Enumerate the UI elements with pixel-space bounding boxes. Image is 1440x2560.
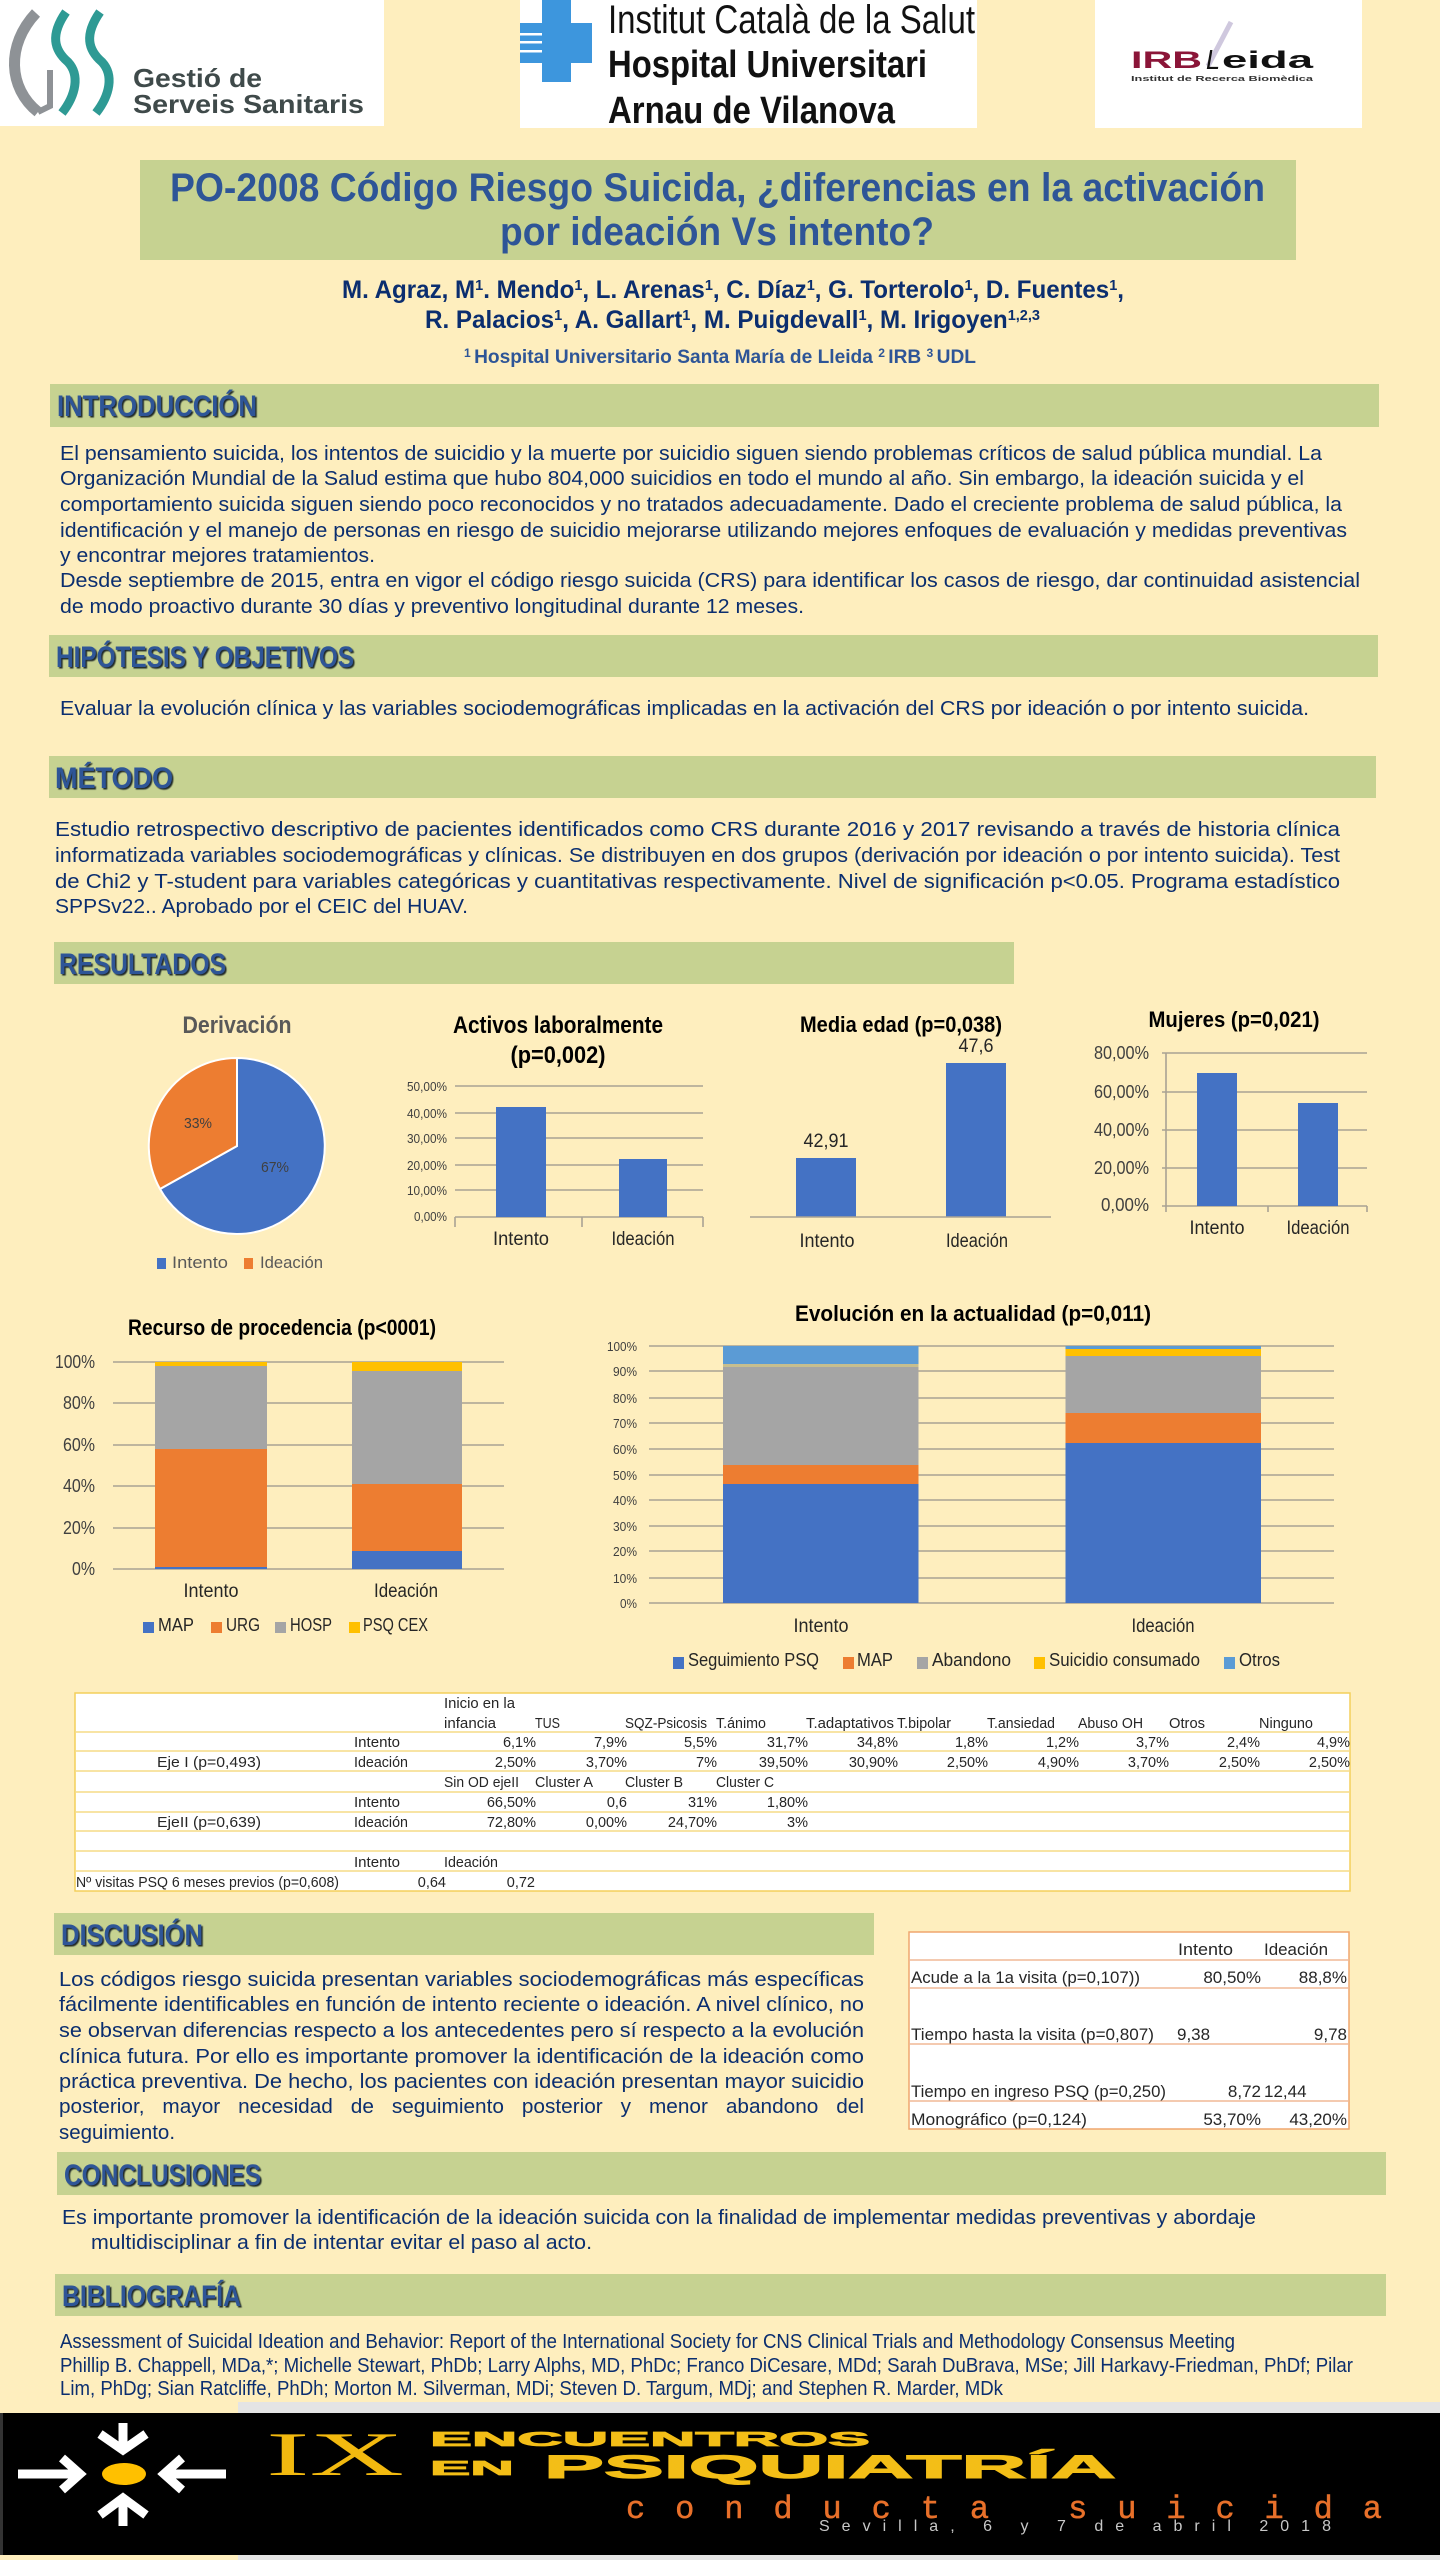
bar chart: activos laboralmente: 20,00% <box>407 1158 447 1173</box>
table: visitas e ingreso: 80,50% <box>1203 1968 1261 1987</box>
table: visitas e ingreso: 53,70% <box>1203 2110 1261 2129</box>
bar chart: media edad: Ideación <box>946 1231 1008 1252</box>
authors: 1 <box>705 277 713 294</box>
authors: , M. Irigoyen <box>867 306 1008 334</box>
table: visitas e ingreso: Tiempo hasta la visita (p=0,807) <box>911 2025 1154 2044</box>
text block: discusión: se observan diferencias respecto a los antecedentes pero sí respecto a la evolución <box>59 2019 864 2042</box>
banner: IX Encuentros en Psiquiatría: EN <box>430 2458 514 2480</box>
stacked bar chart: evolución en la actualidad: Ideación <box>1132 1616 1194 1637</box>
table: eje I, eje II, visitas: 0,00% <box>586 1815 627 1831</box>
pie chart: derivación <box>149 1012 325 1272</box>
table: eje I, eje II, visitas: infancia <box>444 1716 497 1732</box>
table: eje I, eje II, visitas: 2,50% <box>947 1755 988 1771</box>
table: eje I, eje II, visitas: Abuso OH <box>1078 1716 1143 1732</box>
table: eje I, eje II, visitas: Cluster A <box>535 1775 593 1791</box>
authors: 1,2,3 <box>1008 307 1040 324</box>
affiliations: UDL <box>937 347 976 368</box>
table: eje I, eje II, visitas: 3,70% <box>586 1755 627 1771</box>
panel: conclusiones <box>57 2152 1386 2254</box>
bar chart: mujeres: Intento <box>1190 1218 1244 1239</box>
stacked bar chart: recurso de procedencia: 40% <box>63 1476 95 1496</box>
panel: hipótesis y objetivos <box>49 635 1378 720</box>
heading: discusión: DISCUSIÓN <box>61 1918 203 1952</box>
logo: Hospital Universitari Arnau de Vilanova: Arnau de Vilanova <box>608 90 896 132</box>
pie chart: derivación: 67% <box>261 1159 289 1176</box>
table: eje I, eje II, visitas: 4,9% <box>1317 1735 1350 1751</box>
authors: 1 <box>475 277 483 294</box>
text block: conclusiones <box>62 2206 1256 2254</box>
table: eje I, eje II, visitas: Eje I (p=0,493) <box>157 1755 261 1771</box>
pie chart: derivación: 33% <box>184 1115 212 1132</box>
stacked bar chart: evolución en la actualidad: Evolución en la actualidad (p=0,011) <box>795 1301 1151 1326</box>
table: eje I, eje II, visitas: Inicio en la <box>444 1696 516 1712</box>
table: eje I, eje II, visitas: 1,80% <box>767 1795 808 1811</box>
table: eje I, eje II, visitas: 1,8% <box>955 1735 988 1751</box>
text block: discusión: seguimiento. <box>59 2121 175 2144</box>
stacked bar chart: evolución en la actualidad: Seguimiento PSQ <box>688 1650 819 1670</box>
stacked bar chart: evolución en la actualidad: 100% <box>607 1339 637 1354</box>
table: eje I, eje II, visitas: 72,80% <box>487 1815 536 1831</box>
stacked bar chart: recurso de procedencia: Intento <box>184 1581 238 1602</box>
text block: discusión: posterior, mayor necesidad de seguimiento posterior y menor abandono del <box>59 2095 864 2118</box>
table: visitas e ingreso: 9,78 <box>1314 2025 1347 2044</box>
pie chart: derivación: Intento <box>172 1253 228 1272</box>
text block: bibliografía: Assessment of Suicidal Ideation and Behavior: Report of the International Society for CNS Clinical Trials and Methodology Consensus Meeting <box>60 2330 1235 2353</box>
stacked bar chart: recurso de procedencia: 80% <box>63 1393 95 1413</box>
affiliations: 3 <box>927 346 937 360</box>
text block: introducción <box>60 442 1360 618</box>
table: visitas e ingreso: 9,38 <box>1177 2025 1210 2044</box>
table: eje I, eje II, visitas: 24,70% <box>668 1815 717 1831</box>
panel: introducción <box>50 384 1379 618</box>
table: visitas e ingreso: Intento <box>1178 1940 1233 1959</box>
table: eje I, eje II, visitas: Nº visitas PSQ 6 meses previos (p=0,608) <box>76 1875 339 1891</box>
table: eje I, eje II, visitas: T.adaptativos <box>806 1716 894 1732</box>
text block: método: informatizada variables sociodemográficas y clínicas. Se distribuyen en dos grupos (derivación por ideación o por intento suicida). Test <box>55 844 1340 867</box>
bar chart: mujeres <box>1094 1007 1367 1239</box>
stacked bar chart: evolución en la actualidad: 70% <box>613 1416 637 1431</box>
stacked bar chart: evolución en la actualidad: 80% <box>613 1391 637 1406</box>
logo: IRB Lleida: IRB <box>1131 47 1202 74</box>
table: eje I, eje II, visitas: Cluster C <box>716 1775 774 1791</box>
bar chart: activos laboralmente: Ideación <box>612 1229 674 1250</box>
table: eje I, eje II, visitas: Ideación <box>444 1855 498 1871</box>
table: eje I, eje II, visitas: 6,1% <box>503 1735 536 1751</box>
bar chart: activos laboralmente <box>407 1012 703 1250</box>
authors: 1 <box>807 277 815 294</box>
table: eje I, eje II, visitas: 34,8% <box>857 1735 898 1751</box>
banner: IX Encuentros en Psiquiatría: IX <box>266 2421 404 2489</box>
stacked bar chart: recurso de procedencia: 60% <box>63 1435 95 1455</box>
bar chart: mujeres: Ideación <box>1286 1218 1350 1239</box>
bar chart: media edad: Media edad (p=0,038) <box>800 1012 1002 1037</box>
table: visitas e ingreso <box>909 1932 1349 2129</box>
table: eje I, eje II, visitas: Ninguno <box>1259 1716 1313 1732</box>
stacked bar chart: evolución en la actualidad: 10% <box>613 1571 637 1586</box>
logo: Hospital Universitari Arnau de Vilanova <box>520 0 977 132</box>
stacked bar chart: evolución en la actualidad: Abandono <box>932 1650 1011 1670</box>
authors: 1 <box>964 277 973 294</box>
authors: 1 <box>554 307 562 324</box>
table: visitas e ingreso: 8,72 <box>1228 2082 1261 2101</box>
stacked bar chart: evolución en la actualidad: 50% <box>613 1468 637 1483</box>
bar chart: activos laboralmente: 40,00% <box>407 1106 447 1121</box>
authors: , A. Gallart <box>562 306 683 334</box>
bar chart: media edad: 42,91 <box>804 1131 848 1152</box>
bar chart: mujeres: 40,00% <box>1094 1120 1149 1140</box>
table: visitas e ingreso: 12,44 <box>1264 2082 1307 2101</box>
table: eje I, eje II, visitas: Cluster B <box>625 1775 683 1791</box>
table: eje I, eje II, visitas: 2,50% <box>1309 1755 1350 1771</box>
authors: M. Agraz, M <box>342 276 480 304</box>
table: visitas e ingreso: 43,20% <box>1289 2110 1347 2129</box>
bar chart: activos laboralmente: 30,00% <box>407 1131 447 1146</box>
banner: IX Encuentros en Psiquiatría: PSIQUIATRÍA <box>544 2449 1116 2485</box>
bar chart: media edad: 47,6 <box>958 1036 994 1057</box>
text block: bibliografía <box>60 2330 1353 2400</box>
authors: R. Palacios <box>425 306 558 334</box>
text block: conclusiones: multidisciplinar a fin de intentar evitar el paso al acto. <box>91 2231 592 2254</box>
table: visitas e ingreso: 88,8% <box>1299 1968 1347 1987</box>
logo: Gestió de Serveis Sanitaris: Gestió de <box>133 63 262 93</box>
table: eje I, eje II, visitas: 3,7% <box>1136 1735 1169 1751</box>
table: visitas e ingreso: Monográfico (p=0,124) <box>911 2110 1087 2129</box>
bar chart: activos laboralmente: 0,00% <box>414 1209 447 1224</box>
table: eje I, eje II, visitas: Sin OD ejeII <box>444 1775 519 1791</box>
authors: , G. Torterolo <box>815 276 964 304</box>
panel: resultados heading bar <box>54 942 1014 984</box>
text block: método: de Chi2 y T-student para variables categóricas y cuantitativas respectivamente. Nivel de significación p<0.05. Programa estadístico <box>55 870 1340 893</box>
bar chart: activos laboralmente: 10,00% <box>407 1183 447 1198</box>
stacked bar chart: evolución en la actualidad: 20% <box>613 1544 637 1559</box>
bar chart: activos laboralmente: Intento <box>493 1229 549 1250</box>
heading: hipótesis y objetivos: HIPÓTESIS Y OBJETIVOS <box>56 640 354 674</box>
text block: método <box>55 818 1341 918</box>
banner: IX Encuentros en Psiquiatría <box>0 2402 1440 2560</box>
stacked bar chart: evolución en la actualidad: Otros <box>1239 1650 1280 1670</box>
affiliations: Hospital Universitario Santa María de Lleida <box>474 347 878 368</box>
title <box>140 160 1296 260</box>
text block: introducción: identificación y el manejo de personas en riesgo de suicidio mejorarse utilizando mejores enfoques de evaluación y medidas preventivas <box>60 519 1347 542</box>
stacked bar chart: recurso de procedencia <box>55 1315 504 1635</box>
stacked bar chart: evolución en la actualidad: 90% <box>613 1364 637 1379</box>
panel: discusión <box>54 1913 874 2144</box>
table: eje I, eje II, visitas: 31,7% <box>767 1735 808 1751</box>
authors: . Mendo <box>483 276 574 304</box>
bar chart: activos laboralmente: 50,00% <box>407 1079 447 1094</box>
table: eje I, eje II, visitas: 4,90% <box>1038 1755 1079 1771</box>
text block: introducción: Desde septiembre de 2015, entra en vigor el código riesgo suicida (CRS) para identificar los casos de riesgo, dar continuidad asistencial <box>60 569 1360 592</box>
affiliations: IRB <box>888 347 927 368</box>
table: eje I, eje II, visitas: 2,50% <box>1219 1755 1260 1771</box>
stacked bar chart: evolución en la actualidad: MAP <box>857 1650 893 1670</box>
authors: , D. Fuentes <box>973 276 1109 304</box>
panel: método <box>49 756 1376 918</box>
table: eje I, eje II, visitas: 0,64 <box>418 1875 446 1891</box>
authors: , C. Díaz <box>713 276 807 304</box>
text block: discusión <box>59 1968 864 2144</box>
heading: método: MÉTODO <box>55 761 173 795</box>
table: eje I, eje II, visitas: Ideación <box>354 1815 408 1831</box>
logo: IRB Lleida: L <box>1206 44 1220 75</box>
bar chart: mujeres: 20,00% <box>1094 1158 1149 1178</box>
bar chart: media edad: Intento <box>800 1231 854 1252</box>
table: eje I, eje II, visitas: 1,2% <box>1046 1735 1079 1751</box>
stacked bar chart: recurso de procedencia: MAP <box>158 1615 194 1635</box>
table: eje I, eje II, visitas: 39,50% <box>759 1755 808 1771</box>
table: eje I, eje II, visitas: 2,4% <box>1227 1735 1260 1751</box>
stacked bar chart: recurso de procedencia: Recurso de procedencia (p<0001) <box>128 1315 436 1340</box>
table: eje I, eje II, visitas: T.ansiedad <box>987 1716 1055 1732</box>
bar chart: activos laboralmente: (p=0,002) <box>510 1042 606 1069</box>
heading: resultados: RESULTADOS <box>59 948 226 981</box>
stacked bar chart: recurso de procedencia: 100% <box>55 1352 95 1372</box>
text block: discusión: clínica futura. Por ello es importante promover la identificación de la ideación como <box>59 2045 864 2068</box>
table: eje I, eje II, visitas: SQZ-Psicosis <box>625 1716 707 1732</box>
stacked bar chart: evolución en la actualidad: Intento <box>794 1616 848 1637</box>
table: eje I, eje II, visitas: 30,90% <box>849 1755 898 1771</box>
bar chart: media edad <box>750 1012 1051 1252</box>
logo: Hospital Universitari Arnau de Vilanova: Hospital Universitari <box>608 44 927 86</box>
table: eje I, eje II, visitas: 3,70% <box>1128 1755 1169 1771</box>
table: eje I, eje II, visitas: TUS <box>535 1716 560 1732</box>
pie chart: derivación: Derivación <box>182 1012 292 1039</box>
banner: IX Encuentros en Psiquiatría: ENCUENTROS <box>430 2429 870 2451</box>
authors: 1 <box>1109 277 1117 294</box>
table: eje I, eje II, visitas: 7,9% <box>594 1735 627 1751</box>
stacked bar chart: recurso de procedencia: PSQ CEX <box>363 1615 428 1635</box>
logo: IRB Lleida: Institut de Recerca Biomèdica <box>1131 76 1313 83</box>
stacked bar chart: recurso de procedencia: 20% <box>63 1518 95 1538</box>
table: eje I, eje II, visitas: 0,72 <box>507 1875 535 1891</box>
authors: 1 <box>858 307 867 324</box>
pie chart: derivación: Ideación <box>260 1253 323 1272</box>
stacked bar chart: evolución en la actualidad: 60% <box>613 1442 637 1457</box>
heading: bibliografía: BIBLIOGRAFÍA <box>62 2279 241 2313</box>
table: eje I, eje II, visitas: 0,6 <box>607 1795 627 1811</box>
text block: bibliografía: Lim, PhDg; Sian Ratcliffe, PhDh; Morton M. Silverman, MDi; Steven D. Targum, MDj; and Stephen R. Marder, MDk <box>60 2377 1004 2400</box>
stacked bar chart: recurso de procedencia: HOSP <box>290 1615 332 1635</box>
table: eje I, eje II, visitas: T.bipolar <box>897 1716 951 1732</box>
affiliations: 2 <box>878 346 888 360</box>
stacked bar chart: evolución en la actualidad: 40% <box>613 1493 637 1508</box>
icon: converging arrows <box>18 2423 226 2526</box>
text block: introducción: de modo proactivo durante 30 días y preventivo longitudinal durante 12 meses. <box>60 595 804 618</box>
panel: bibliografía <box>55 2274 1386 2400</box>
table: eje I, eje II, visitas <box>75 1693 1350 1891</box>
logo: IRB Lleida <box>1095 0 1362 128</box>
table: eje I, eje II, visitas: Intento <box>354 1735 400 1751</box>
table: eje I, eje II, visitas: 31% <box>688 1795 717 1811</box>
table: visitas e ingreso: Tiempo en ingreso PSQ (p=0,250) <box>911 2082 1166 2101</box>
authors: 1 <box>682 307 690 324</box>
text block: hipótesis: Evaluar la evolución clínica y las variables sociodemográficas implicadas en la activación del CRS por ideación o por intento suicida. <box>60 697 1309 720</box>
stacked bar chart: evolución en la actualidad: 0% <box>620 1596 637 1611</box>
stacked bar chart: evolución en la actualidad <box>607 1301 1334 1670</box>
text block: discusión: Los códigos riesgo suicida presentan variables sociodemográficas más específicas <box>59 1968 864 1991</box>
text block: discusión: práctica preventiva. De hecho, los pacientes con ideación presentan mayor suicidio <box>59 2070 864 2093</box>
text block: conclusiones: Es importante promover la identificación de la ideación suicida con la finalidad de implementar medidas preventivas y abordaje <box>62 2206 1256 2229</box>
stacked bar chart: evolución en la actualidad: Suicidio consumado <box>1049 1650 1200 1670</box>
table: eje I, eje II, visitas: 7% <box>696 1755 717 1771</box>
logo: Gestió de Serveis Sanitaris: Serveis Sanitaris <box>133 89 364 119</box>
bar chart: mujeres: 60,00% <box>1094 1082 1149 1102</box>
stacked bar chart: recurso de procedencia: 0% <box>72 1559 95 1579</box>
heading: introducción: INTRODUCCIÓN <box>57 389 257 423</box>
table: eje I, eje II, visitas: 2,50% <box>495 1755 536 1771</box>
table: eje I, eje II, visitas: Otros <box>1169 1716 1205 1732</box>
authors: , <box>1117 276 1124 304</box>
logo: Gestió de Serveis Sanitaris <box>0 0 384 126</box>
authors: 1 <box>574 277 582 294</box>
authors: , M. Puigdevall <box>690 306 858 334</box>
affiliations: 1 <box>464 346 474 360</box>
bar chart: mujeres: 0,00% <box>1101 1195 1149 1215</box>
text block: método: Estudio retrospectivo descriptivo de pacientes identificados como CRS durante 2016 y 2017 revisando a través de historia clínica <box>55 818 1341 841</box>
authors <box>342 276 1124 334</box>
table: eje I, eje II, visitas: 5,5% <box>684 1735 717 1751</box>
bar chart: activos laboralmente: Activos laboralmente <box>453 1012 663 1039</box>
table: eje I, eje II, visitas: 3% <box>787 1815 808 1831</box>
authors: , L. Arenas <box>582 276 705 304</box>
logo: IRB Lleida: eida <box>1222 47 1314 74</box>
table: visitas e ingreso: Ideación <box>1264 1940 1328 1959</box>
table: eje I, eje II, visitas: T.ánimo <box>716 1716 766 1732</box>
table: eje I, eje II, visitas: 66,50% <box>487 1795 536 1811</box>
text block: introducción: y encontrar mejores tratamientos. <box>60 544 375 567</box>
text block: introducción: Organización Mundial de la Salud estima que hubo 804,000 suicidios en todo el mundo al año. Sin embargo, la ideación suicida y el <box>60 467 1304 490</box>
title: PO-2008 Código Riesgo Suicida, ¿diferencias en la activación <box>170 166 1265 210</box>
stacked bar chart: evolución en la actualidad: 30% <box>613 1519 637 1534</box>
table: eje I, eje II, visitas: Ideación <box>354 1755 408 1771</box>
text block: introducción: El pensamiento suicida, los intentos de suicidio y la muerte por suicidio siguen siendo problemas críticos de salud pública mundial. La <box>60 442 1323 465</box>
stacked bar chart: recurso de procedencia: Ideación <box>374 1581 438 1602</box>
text block: introducción: comportamiento suicida siguen siendo poco reconocidos y no tratados adecuadamente. Dado el creciente problema de salud pública, la <box>60 493 1343 516</box>
table: eje I, eje II, visitas: EjeII (p=0,639) <box>157 1815 261 1831</box>
banner: IX Encuentros en Psiquiatría: Sevilla, 6 y 7 de abril 2018 <box>819 2518 1331 2535</box>
table: visitas e ingreso: Acude a la 1a visita (p=0,107)) <box>911 1968 1140 1987</box>
text block: discusión: fácilmente identificables en función de intento reciente o ideación. A nivel clínico, no <box>59 1993 864 2016</box>
table: eje I, eje II, visitas: Intento <box>354 1855 400 1871</box>
banner: IX Encuentros en Psiquiatría: conducta suicida <box>626 2491 1382 2528</box>
text block: método: SPPSv22.. Aprobado por el CEIC del HUAV. <box>55 895 468 918</box>
table: eje I, eje II, visitas: Intento <box>354 1795 400 1811</box>
stacked bar chart: recurso de procedencia: URG <box>226 1615 260 1635</box>
title: por ideación Vs intento? <box>500 210 934 254</box>
bar chart: mujeres: 80,00% <box>1094 1043 1149 1063</box>
bar chart: mujeres: Mujeres (p=0,021) <box>1148 1007 1320 1032</box>
heading: conclusiones: CONCLUSIONES <box>64 2159 261 2192</box>
